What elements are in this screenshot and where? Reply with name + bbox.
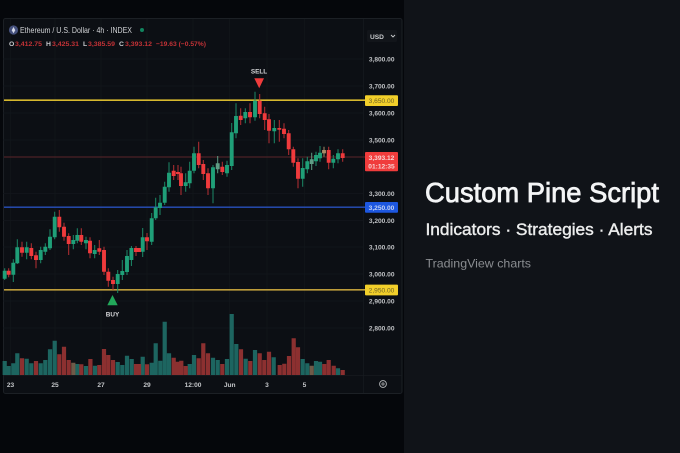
caption: TradingView charts <box>426 256 531 270</box>
price tag 2950: 2,950.00 <box>369 287 395 294</box>
green candle bodies <box>5 101 338 284</box>
time axis labels: 23 <box>7 382 14 389</box>
price axis labels: 2,900.00 <box>369 298 395 306</box>
time axis labels: 5 <box>303 382 307 389</box>
chart header: OHLC values <box>9 41 206 48</box>
subtitle: Indicators · Strategies · Alerts <box>426 220 652 239</box>
price axis labels: 2,800.00 <box>369 326 395 332</box>
price tag current: 3,393.12 <box>369 155 395 162</box>
red candle bodies <box>9 101 343 284</box>
green candle wicks <box>5 92 338 293</box>
chart header: OHLC values: O <box>9 41 14 48</box>
price axis labels: 3,300.00 <box>369 191 395 198</box>
price axis labels: 3,700.00 <box>369 84 395 90</box>
price axis labels: 3,600.00 <box>369 110 395 118</box>
price axis labels: 3,500.00 <box>369 138 395 144</box>
price tag 3650: 3,650.00 <box>369 98 395 105</box>
time axis labels <box>7 382 307 389</box>
buy signal: BUY <box>106 312 120 319</box>
chart header: OHLC values: 3,385.59 <box>88 41 115 48</box>
muted candles <box>218 159 312 169</box>
buy signal <box>106 295 120 319</box>
price axis labels: 3,800.00 <box>369 56 395 64</box>
currency selector <box>367 30 397 42</box>
chart header: OHLC values: L <box>83 41 87 48</box>
chart header: OHLC values: H <box>46 41 51 48</box>
panel: chart window <box>3 18 402 394</box>
panel: right text background <box>404 0 680 453</box>
volume bars <box>5 314 343 375</box>
price tag 3650 <box>365 95 398 106</box>
price axis labels: 3,000.00 <box>369 272 395 278</box>
chart header: OHLC values: 3,393.12 <box>125 41 152 48</box>
price tag current <box>365 152 398 171</box>
price tag 3250 <box>365 202 398 213</box>
time axis labels: 25 <box>51 382 59 389</box>
level line 3250 <box>4 206 365 208</box>
title: Custom Pine Script <box>425 177 659 208</box>
support line 2950 <box>4 289 365 291</box>
currency selector: USD <box>370 34 384 41</box>
time axis labels: 12:00 <box>185 382 202 389</box>
time axis labels: Jun <box>224 382 236 389</box>
price tag 3250: 3,250.00 <box>369 205 395 212</box>
price tag current: 01:12:35 <box>368 164 395 171</box>
chart header: OHLC values: 3,412.75 <box>15 41 42 48</box>
price axis labels: 3,100.00 <box>369 244 395 252</box>
chart header: OHLC values: C <box>119 41 124 48</box>
price axis labels <box>369 56 395 332</box>
current price line <box>4 156 365 158</box>
sell signal <box>251 68 267 88</box>
chart header: OHLC values: −19.63 (−0.57%) <box>156 41 206 48</box>
icon: axis settings <box>380 381 386 387</box>
time axis labels: 3 <box>265 382 269 389</box>
price axis labels: 3,200.00 <box>369 218 395 225</box>
red candle wicks <box>9 94 343 290</box>
sell signal: SELL <box>251 68 267 76</box>
time axis labels: 27 <box>97 382 105 389</box>
resistance line 3650 <box>4 99 365 101</box>
chart header: symbol title: Ethereum / U.S. Dollar · 4h · INDEX <box>20 26 133 35</box>
candlesticks <box>5 92 343 293</box>
chart header: OHLC values: 3,425.31 <box>52 41 79 48</box>
time axis labels: 29 <box>143 382 151 389</box>
price tag 2950 <box>365 285 398 295</box>
